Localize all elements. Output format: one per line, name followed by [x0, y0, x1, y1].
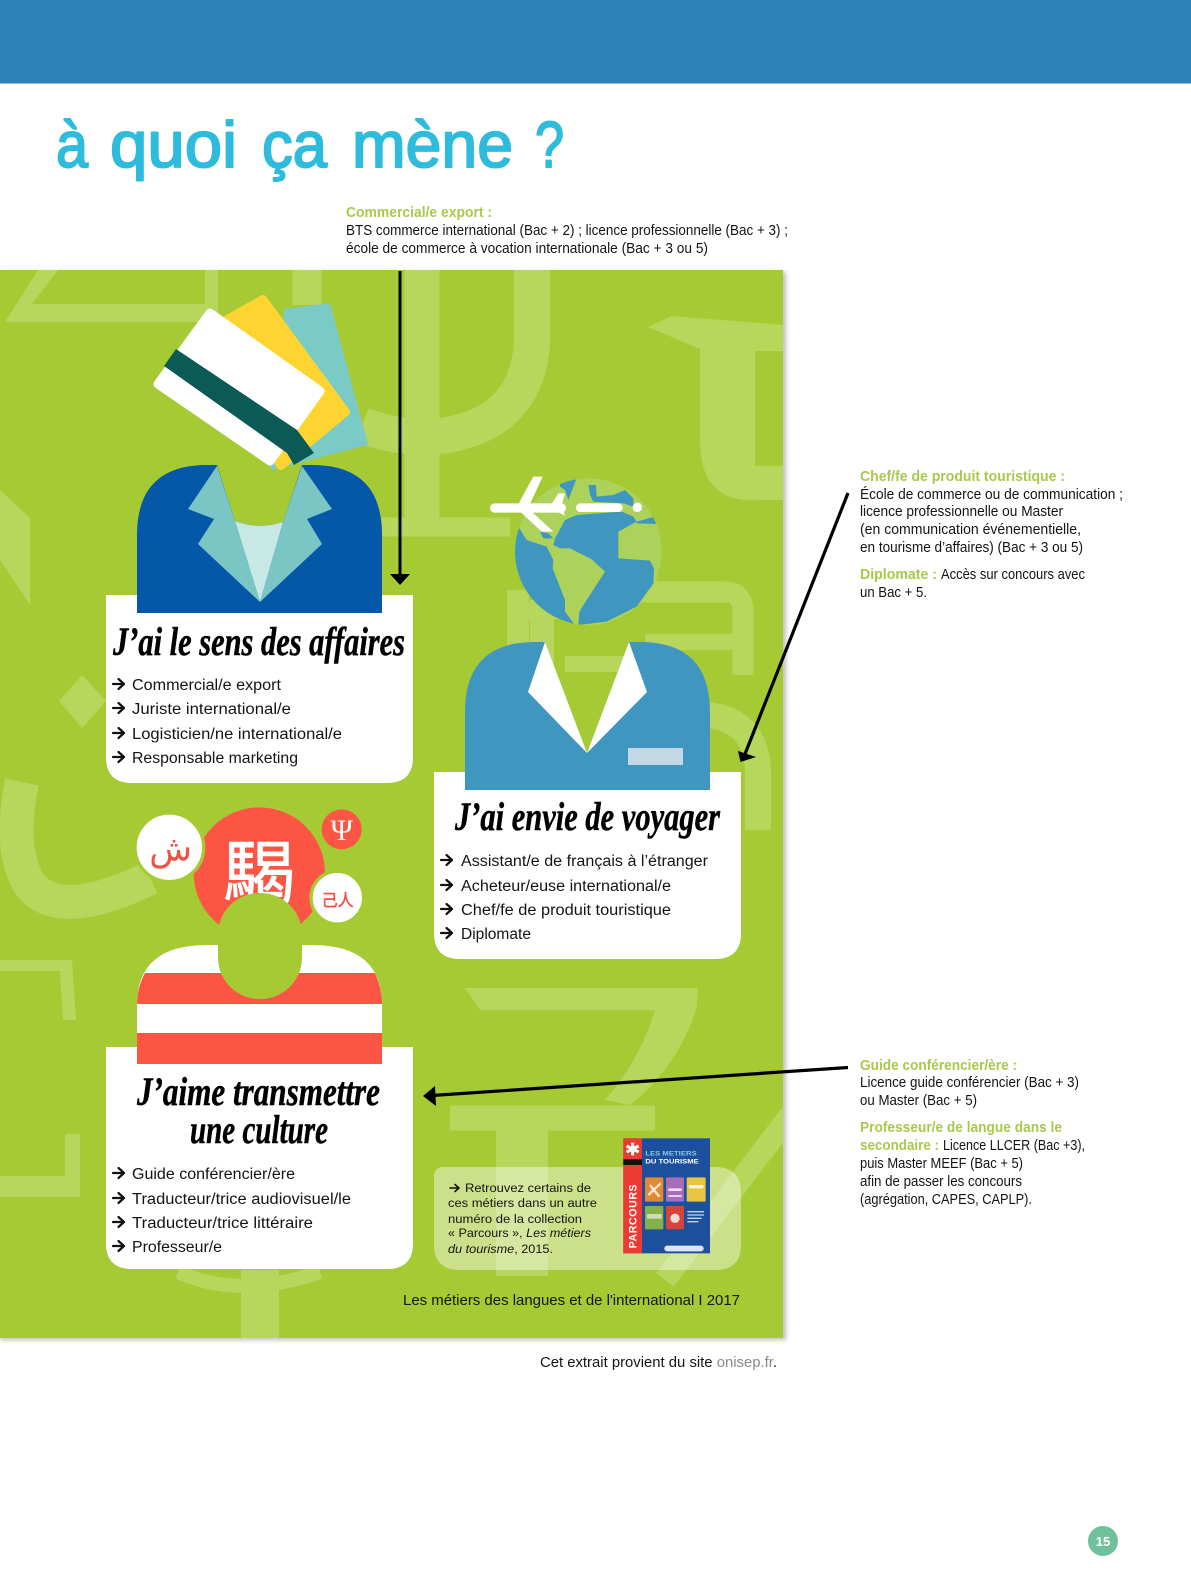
- card: J'aime transmettre une culture: [106, 807, 413, 1269]
- list: [441, 853, 708, 943]
- icon: language bubbles: Ψ: [331, 814, 354, 847]
- note: commercial export: BTS commerce international (Bac + 2) ; licence professionnelle (Bac + 3) ;: [346, 223, 788, 239]
- callout: Parcours box: numéro de la collection: [448, 1212, 582, 1226]
- list: Commercial/e export: [132, 677, 282, 694]
- title: mène: [352, 108, 513, 181]
- note: guide and professeur: Guide conférencier/ère :: [860, 1058, 1017, 1074]
- note: chef de produit and diplomate: licence professionnelle ou Master: [860, 504, 1063, 520]
- list: Guide conférencier/ère: [132, 1166, 295, 1183]
- page number: [1088, 1526, 1118, 1556]
- note: chef de produit and diplomate: un Bac + 5.: [860, 585, 927, 601]
- list: Acheteur/euse international/e: [461, 878, 671, 895]
- list: Diplomate: [461, 926, 531, 943]
- white card body: [106, 1047, 413, 1269]
- footer: publication name: Les métiers des langues et de l'international I 2017: [403, 1293, 740, 1309]
- jacket: striped sweater: [137, 945, 382, 1064]
- note: chef de produit and diplomate: Accès sur concours avec: [941, 567, 1085, 583]
- note: guide and professeur: Licence guide conférencier (Bac + 3): [860, 1075, 1079, 1091]
- callout: Parcours box: du tourisme, 2015.: [448, 1242, 553, 1256]
- title: à: [56, 108, 89, 181]
- arrow: commercial export to card: [390, 271, 410, 585]
- list: Responsable marketing: [132, 750, 298, 767]
- book cover: [623, 1138, 710, 1253]
- source line: Cet extrait provient du site onisep.fr.: [540, 1354, 777, 1371]
- note: guide and professeur: Licence LLCER (Bac +3),: [943, 1138, 1085, 1154]
- list: Professeur/e: [132, 1239, 222, 1256]
- note: chef de produit and diplomate: École de commerce ou de communication ;: [860, 486, 1123, 503]
- title: ?: [535, 108, 564, 181]
- list: [113, 677, 342, 767]
- arrow: guide to card: [423, 1068, 848, 1106]
- green neck: [218, 893, 302, 999]
- page number: 15: [1096, 1534, 1110, 1549]
- book cover: PARCOURS: [628, 1184, 640, 1248]
- note: guide and professeur: puis Master MEEF (Bac + 5): [860, 1156, 1023, 1172]
- panel: green background: [0, 270, 790, 1340]
- title: [56, 108, 564, 181]
- icon: globe and plane: [490, 477, 662, 625]
- callout: Parcours box: Retrouvez certains de: [465, 1181, 591, 1195]
- list: Traducteur/trice littéraire: [132, 1215, 313, 1232]
- icon: bank cards: [158, 299, 367, 469]
- note: chef de produit and diplomate: Chef/fe de produit touristique :: [860, 469, 1065, 485]
- list: Juriste international/e: [132, 701, 291, 718]
- white card body: [106, 595, 413, 783]
- list: Logisticien/ne international/e: [132, 726, 342, 743]
- callout: Parcours box: ces métiers dans un autre: [448, 1196, 597, 1210]
- heading: J’ai envie de voyager: [454, 794, 720, 839]
- note: guide and professeur: Professeur/e de langue dans le: [860, 1120, 1062, 1136]
- note: commercial export: école de commerce à vocation internationale (Bac + 3 ou 5): [346, 241, 708, 257]
- name badge: [628, 748, 683, 765]
- card: J'ai envie de voyager: [434, 477, 741, 959]
- icon: language bubbles: ش: [149, 830, 192, 870]
- note: guide and professeur: ou Master (Bac + 5): [860, 1093, 977, 1109]
- list: Chef/fe de produit touristique: [461, 902, 671, 919]
- top blue banner: [0, 0, 1191, 84]
- arrow: chef de produit to card: [738, 493, 848, 762]
- note: guide and professeur: afin de passer les concours: [860, 1174, 1022, 1190]
- white card body: [434, 772, 741, 959]
- shirt: [235, 521, 283, 602]
- callout: Parcours box: « Parcours », Les métiers: [448, 1226, 591, 1240]
- book cover: DU TOURISME: [645, 1158, 699, 1165]
- jacket: light blue: [465, 642, 710, 790]
- note: chef de produit and diplomate: [860, 469, 1123, 601]
- note: guide and professeur: (agrégation, CAPES, CAPLP).: [860, 1192, 1032, 1208]
- lapels: [188, 466, 332, 602]
- note: commercial export: [346, 205, 788, 257]
- note: chef de produit and diplomate: en tourisme d’affaires) (Bac + 3 ou 5): [860, 540, 1083, 556]
- collar: [528, 642, 647, 753]
- note: commercial export: Commercial/e export :: [346, 205, 492, 221]
- title: ça: [262, 108, 328, 181]
- list: Assistant/e de français à l’étranger: [461, 853, 708, 870]
- card: J'ai le sens des affaires: [106, 299, 413, 783]
- icon: language bubbles: [135, 807, 364, 939]
- list: [113, 1166, 351, 1256]
- heading: J’aime transmettre: [136, 1069, 380, 1114]
- callout: Parcours box: [434, 1167, 741, 1270]
- note: chef de produit and diplomate: Diplomate :: [860, 567, 937, 583]
- heading: [136, 1069, 380, 1152]
- jacket: blue: [137, 465, 382, 613]
- title: quoi: [110, 108, 237, 181]
- heading: une culture: [190, 1107, 328, 1152]
- heading: J’ai le sens des affaires: [112, 619, 405, 664]
- note: chef de produit and diplomate: (en communication événementielle,: [860, 522, 1081, 538]
- icon: language bubbles: 騔: [223, 818, 295, 920]
- book cover: LES METIERS: [645, 1150, 697, 1157]
- icon: language bubbles: 己人: [322, 887, 354, 911]
- note: guide and professeur: secondaire :: [860, 1138, 939, 1154]
- list: Traducteur/trice audiovisuel/le: [132, 1191, 351, 1208]
- note: guide and professeur: [860, 1058, 1085, 1208]
